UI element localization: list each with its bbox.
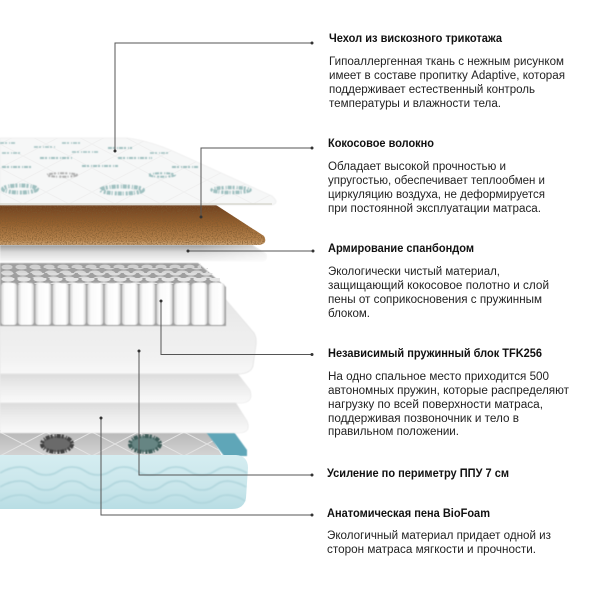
leader: spring block <box>161 301 312 354</box>
leader dots <box>100 42 314 516</box>
text block: biofoam <box>327 508 551 556</box>
text block: spunbond: блоком. <box>328 308 370 320</box>
perimeter foam inside wall <box>206 432 247 456</box>
text block: spring block: нагрузку по всей поверхности матраса, <box>328 399 543 411</box>
text block: spring block <box>328 348 570 438</box>
front row of spring coils <box>1 283 225 325</box>
text block: spunbond: пены от соприкосновения с пружинным <box>328 294 542 306</box>
leader: spunbond <box>188 250 313 252</box>
text block: cover: температуры и влажности тела. <box>329 98 501 110</box>
text block: biofoam: Экологичный материал придает одной из <box>327 530 551 542</box>
text block: coconut fibre: Обладает высокой прочностью и <box>328 161 506 173</box>
layer: independent spring block <box>0 263 226 326</box>
text block: cover: Гипоаллергенная ткань с нежным рисунком <box>329 56 564 68</box>
text block: coconut fibre: при постоянной эксплуатации матраса. <box>328 203 541 215</box>
leader: biofoam <box>101 418 312 515</box>
text block: cover <box>329 33 565 110</box>
text block: cover: Чехол из вискозного трикотажа <box>329 33 503 45</box>
text block: cover: имеет в составе пропитку Adaptive, которая <box>329 70 565 82</box>
layer: foam sheet two <box>0 374 251 403</box>
text block: coconut fibre: Кокосовое волокно <box>328 138 434 150</box>
text block: spring block: автономных пружин, которые распределяют <box>328 385 570 397</box>
layer: coconut fibre <box>0 205 270 246</box>
layer: foam sheet three <box>0 403 248 433</box>
leader: coconut fibre <box>201 148 312 217</box>
text block: spring block: На одно спальное место приходится 500 <box>328 371 549 383</box>
layer: bottom mattress with quilted inside <box>0 430 248 509</box>
mattress layers illustration <box>0 138 276 509</box>
quilt ornaments <box>42 436 160 452</box>
layer: quilted viscose cover <box>0 138 276 205</box>
layer: spunbond reinforcement <box>0 245 266 261</box>
leader lines <box>101 43 313 515</box>
text block: spunbond: Экологически чистый материал, <box>328 266 500 278</box>
text block: coconut fibre: упругостью, обеспечивает теплообмен и <box>328 175 545 187</box>
text block: spring block: правильном положении. <box>328 426 459 438</box>
text block: spunbond: Армирование спанбондом <box>328 243 474 255</box>
cover pattern motifs <box>0 143 250 194</box>
text block: spring block: поддерживая позвоночник и тело в <box>328 413 519 425</box>
leader: cover <box>115 43 312 151</box>
text block: biofoam: Анатомическая пена BioFoam <box>327 508 490 520</box>
text block: spunbond <box>328 243 549 320</box>
leader: perimeter foam <box>139 351 312 475</box>
text block: cover: поддерживает естественный контроль <box>329 84 535 96</box>
text block: coconut fibre <box>328 138 545 215</box>
text block: spunbond: защищающий кокосовое полотно и слой <box>328 280 549 292</box>
wave quilting on mattress side <box>0 467 247 503</box>
text block: spring block: Независимый пружинный блок TFK256 <box>328 348 542 360</box>
text block: coconut fibre: циркуляцию воздуха, не деформируется <box>328 189 545 201</box>
layer: foam base of spring block <box>0 300 256 374</box>
text block: biofoam: сторон матраса мягкости и прочности. <box>327 544 536 556</box>
heading: perimeter foam: Усиление по периметру ППУ 7 см <box>327 468 509 480</box>
